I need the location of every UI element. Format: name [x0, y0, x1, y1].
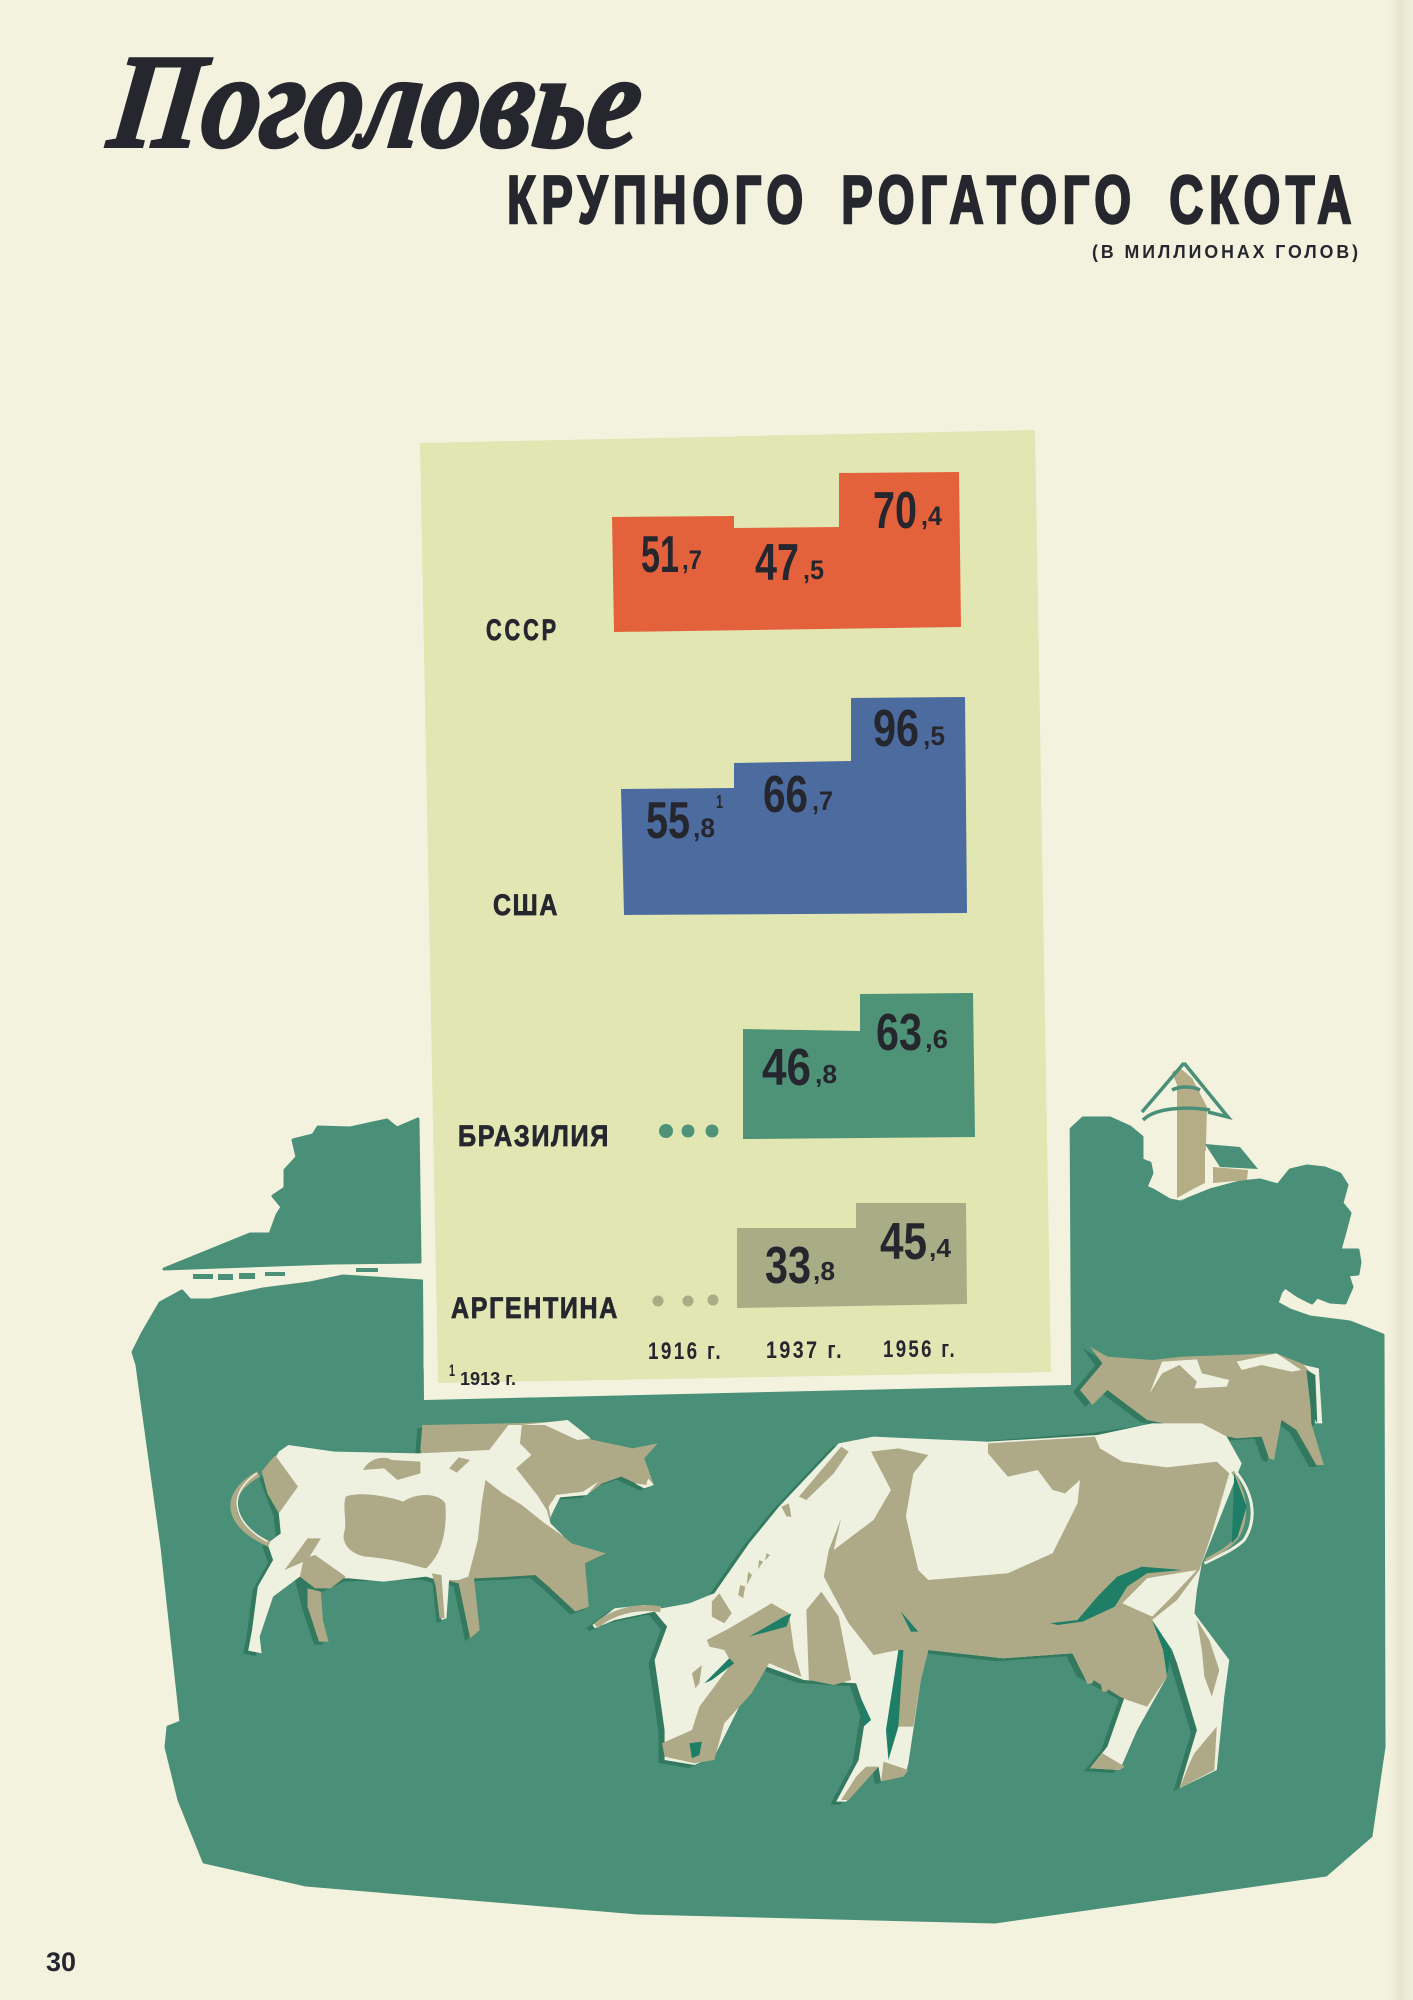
values: USA: 66: [763, 766, 808, 824]
values: Brazil: [762, 1004, 948, 1097]
tan coat patches: [662, 1437, 1229, 1800]
values: USA: ,7: [812, 786, 833, 816]
cow: back right: [1073, 1347, 1324, 1467]
cow: large foreground: [586, 1423, 1252, 1805]
values: USA: ,8: [693, 813, 715, 843]
values: Brazil: ,6: [925, 1024, 948, 1054]
values: USA: 55: [646, 792, 690, 850]
values: Brazil: 63: [876, 1004, 922, 1062]
values: USSR: ,5: [803, 555, 824, 585]
cow: left, with second cow behind: [233, 1420, 658, 1656]
values: Argentina: ,4: [929, 1233, 952, 1263]
chart: Brazil: [458, 993, 975, 1153]
year axis labels: 1956 г.: [883, 1336, 957, 1363]
year axis labels: [648, 1336, 957, 1365]
chart: USA: [493, 697, 967, 922]
values: USSR: 51: [641, 526, 679, 584]
horn: [596, 1608, 661, 1626]
subtitle: (В МИЛЛИОНАХ ГОЛОВ): [1092, 242, 1361, 262]
values: USSR: ,4: [921, 501, 942, 531]
shadow: [586, 1425, 1236, 1805]
chart: USSR: [486, 472, 961, 647]
values: USA: 96: [873, 700, 919, 758]
values: Argentina: [765, 1213, 952, 1295]
white body: [592, 1423, 1242, 1802]
landscape: green field and trees: [133, 1118, 1384, 1922]
values: Brazil: ,8: [815, 1059, 837, 1089]
icon: silo with roof and small house: [1142, 1063, 1258, 1202]
footnote: 1: [449, 1361, 455, 1380]
road dashes: [193, 1268, 378, 1280]
footnote: 1913 г.: [460, 1369, 516, 1389]
values: Argentina: ,8: [813, 1256, 835, 1286]
values: USA: 1: [716, 792, 723, 812]
bars: USSR: [612, 472, 961, 632]
label: Brazil: БРАЗИЛИЯ: [458, 1120, 610, 1153]
inner thigh and flank: [1122, 1570, 1197, 1617]
bars: USA: [621, 697, 967, 915]
chart: Argentina: [451, 1203, 967, 1325]
no-data dots: Brazil: [659, 1124, 718, 1138]
label: USSR: СССР: [486, 614, 559, 647]
values: USA: [646, 700, 945, 850]
chart panel: [420, 430, 1051, 1383]
values: Argentina: 45: [880, 1213, 927, 1271]
front cow white body: [248, 1420, 654, 1653]
values: USSR: ,7: [682, 545, 702, 575]
bars: Argentina: [737, 1203, 967, 1308]
page number: 30: [46, 1947, 76, 1977]
values: USSR: [641, 482, 942, 592]
values: USSR: 70: [873, 482, 917, 540]
values: USSR: 47: [755, 534, 799, 592]
chart panel border: [416, 424, 1071, 1400]
front cow patches: [262, 1455, 470, 1642]
label: Argentina: АРГЕНТИНА: [451, 1292, 619, 1325]
back cow body: [420, 1422, 658, 1638]
tail: [233, 1474, 269, 1544]
tail: [1204, 1470, 1252, 1563]
script title: Поголовье: [102, 27, 651, 176]
bars: Brazil: [743, 993, 975, 1139]
year axis labels: 1916 г.: [648, 1338, 723, 1365]
label: USA: США: [493, 889, 559, 922]
dark details: [689, 1473, 1247, 1760]
footnote: [449, 1361, 516, 1389]
no-data dots: Argentina: [652, 1294, 718, 1306]
year axis labels: 1937 г.: [766, 1337, 844, 1364]
values: USA: ,5: [923, 721, 945, 751]
values: Argentina: 33: [765, 1237, 811, 1295]
values: Brazil: 46: [762, 1039, 811, 1097]
